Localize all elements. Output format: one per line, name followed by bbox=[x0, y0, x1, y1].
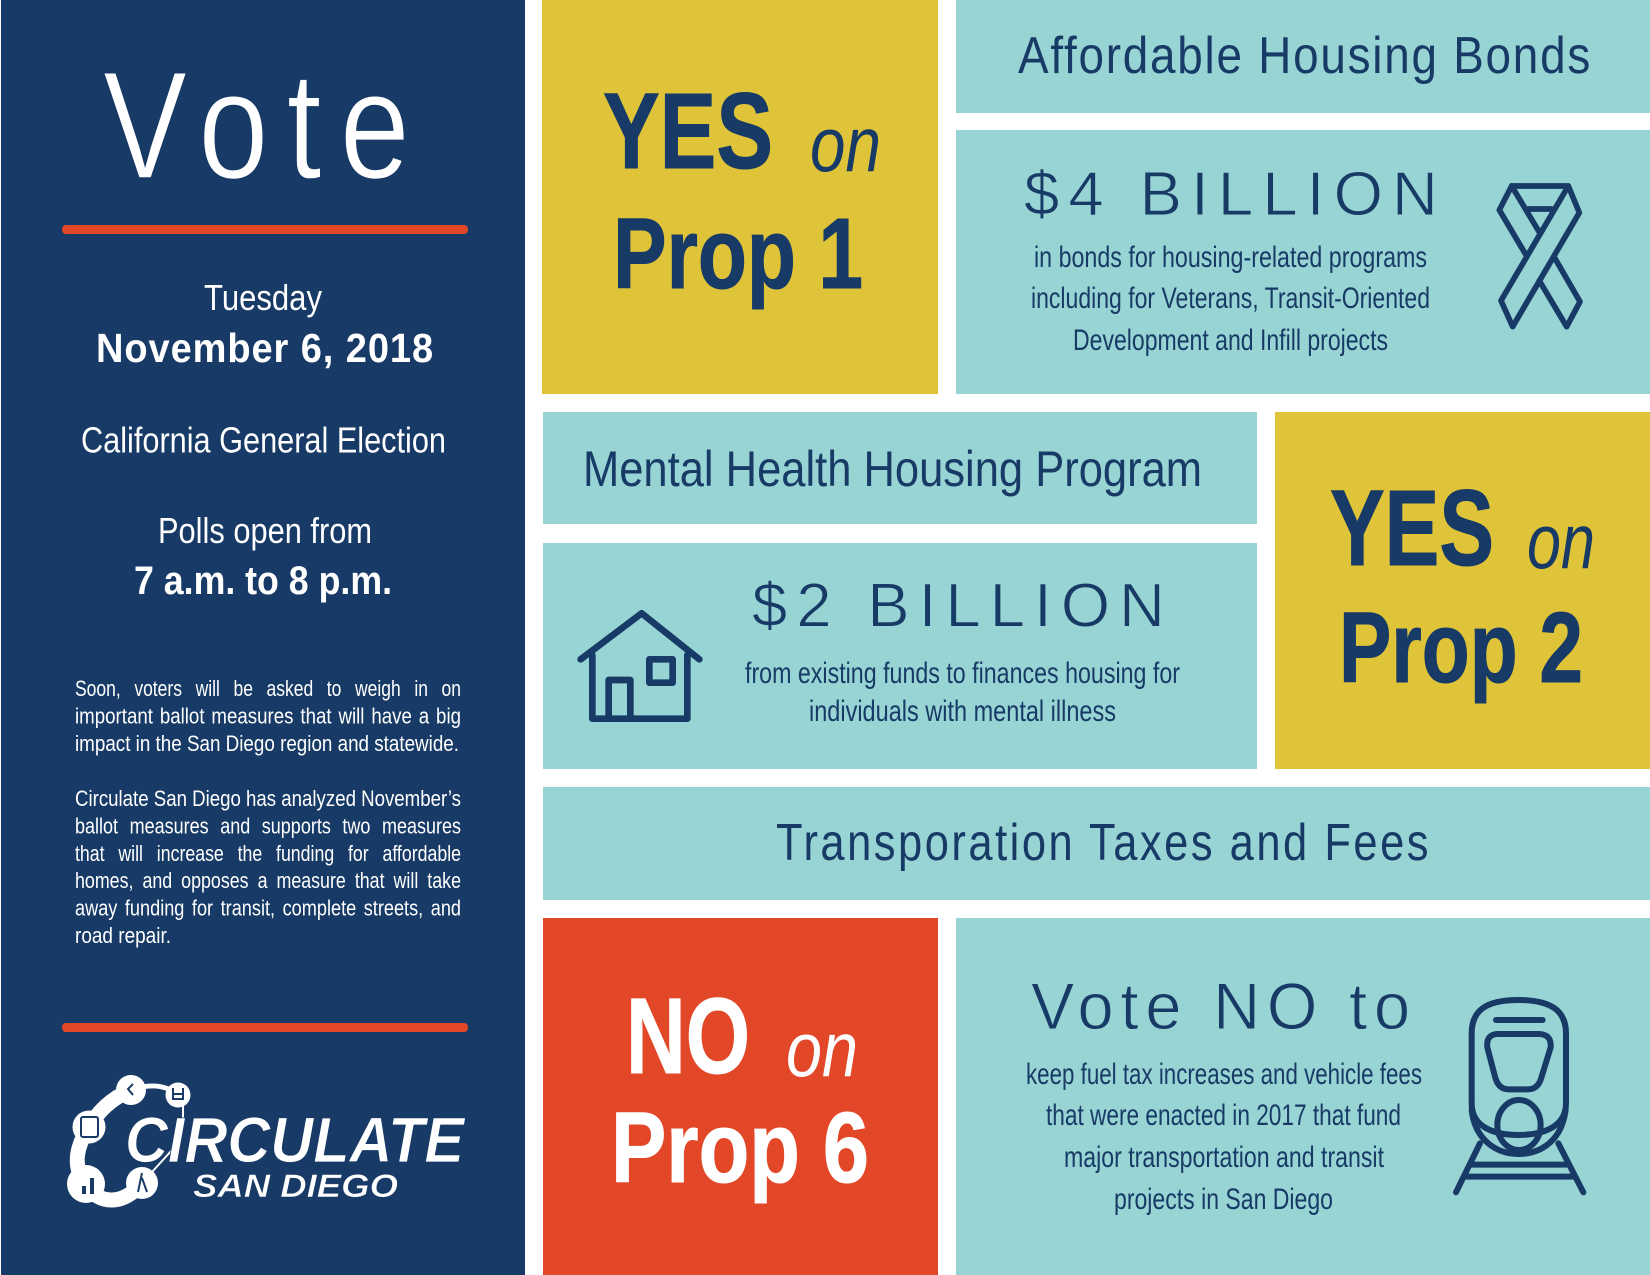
panel: no on prop 6: Prop 6 bbox=[611, 1092, 869, 1204]
panel: 2 billion: from existing funds to finances housing for bbox=[745, 657, 1180, 690]
panel: 4 billion: including for Veterans, Transit-Oriented bbox=[1031, 282, 1430, 315]
panel: 4 billion: Development and Infill projects bbox=[1073, 324, 1388, 357]
panel: vote no: projects in San Diego bbox=[1114, 1183, 1333, 1216]
panel: vote no bbox=[956, 918, 1650, 1275]
text: election date bbox=[96, 277, 434, 371]
panel: 2 billion bbox=[543, 543, 1257, 769]
panel: mental health heading bbox=[543, 412, 1257, 524]
panel: transportation heading: Transporation Taxes and Fees bbox=[776, 814, 1431, 872]
panel: vote no: Vote NO to bbox=[1031, 969, 1417, 1043]
panel: yes on prop 2: YES bbox=[1330, 467, 1494, 588]
icon: ribbon bbox=[1499, 186, 1580, 327]
text: supporting paragraph: that will increase the funding for affordable bbox=[75, 841, 461, 866]
text: intro paragraph: important ballot measures that will have a big bbox=[75, 703, 461, 728]
panel: no on prop 6: NO bbox=[626, 975, 750, 1096]
divider: top red bar bbox=[62, 225, 468, 234]
text: poll hours: Polls open from bbox=[158, 510, 372, 551]
panel: no on prop 6 bbox=[543, 918, 938, 1275]
panel: vote no: keep fuel tax increases and vehicle fees bbox=[1026, 1058, 1422, 1091]
panel: affordable housing heading: Affordable Housing Bonds bbox=[1018, 27, 1592, 85]
panel: yes on prop 2 bbox=[1275, 412, 1650, 769]
text: election date: Tuesday bbox=[204, 277, 322, 318]
panel: left sidebar bbox=[1, 0, 525, 1275]
panel: 4 billion: $4 BILLION bbox=[1024, 160, 1447, 229]
icon: train bbox=[1456, 1000, 1583, 1192]
text: poll hours: 7 a.m. to 8 p.m. bbox=[134, 559, 392, 603]
panel: 2 billion: $2 BILLION bbox=[752, 572, 1174, 640]
text: poll hours bbox=[134, 510, 392, 603]
text: supporting paragraph: Circulate San Diego has analyzed November’s bbox=[75, 786, 461, 811]
title: Vote: Vote bbox=[103, 40, 428, 211]
text: supporting paragraph: ballot measures and supports two measures bbox=[75, 813, 461, 838]
text: election date: November 6, 2018 bbox=[96, 325, 434, 371]
text: election name: California General Election bbox=[81, 420, 446, 460]
logo: Circulate San Diego bbox=[67, 1075, 466, 1204]
text: intro paragraph bbox=[75, 676, 461, 756]
text: intro paragraph: impact in the San Diego region and statewide. bbox=[75, 731, 459, 756]
logo wordmark: CIRCULATE bbox=[125, 1104, 466, 1176]
text: supporting paragraph bbox=[75, 786, 461, 948]
text: supporting paragraph: homes, and opposes a measure that will take bbox=[75, 868, 461, 893]
panel: yes on prop 2: on bbox=[1527, 497, 1595, 585]
icon: house bbox=[581, 613, 699, 719]
panel: no on prop 6: on bbox=[786, 1005, 858, 1093]
text: supporting paragraph: away funding for transit, complete streets, and bbox=[75, 896, 461, 921]
panel: 2 billion: individuals with mental illness bbox=[809, 695, 1116, 728]
panel: yes on prop 1: Prop 1 bbox=[613, 198, 863, 310]
panel: 4 billion bbox=[956, 130, 1650, 394]
panel: mental health heading: Mental Health Housing Program bbox=[583, 441, 1202, 497]
panel: affordable housing heading bbox=[956, 0, 1650, 113]
panel: yes on prop 1 bbox=[542, 0, 938, 394]
panel: 4 billion: in bonds for housing-related programs bbox=[1034, 241, 1427, 274]
panel: yes on prop 1: YES bbox=[603, 70, 773, 191]
panel: vote no: major transportation and transit bbox=[1064, 1141, 1385, 1174]
panel: yes on prop 2: Prop 2 bbox=[1339, 592, 1583, 704]
text: supporting paragraph: road repair. bbox=[75, 923, 171, 948]
panel: yes on prop 1: on bbox=[810, 100, 881, 188]
panel: vote no: that were enacted in 2017 that fund bbox=[1046, 1099, 1401, 1132]
panel: transportation heading bbox=[543, 787, 1650, 900]
logo subtitle: SAN DIEGO bbox=[193, 1168, 398, 1204]
text: intro paragraph: Soon, voters will be asked to weigh in on bbox=[75, 676, 461, 701]
divider: bottom red bar bbox=[62, 1023, 468, 1032]
